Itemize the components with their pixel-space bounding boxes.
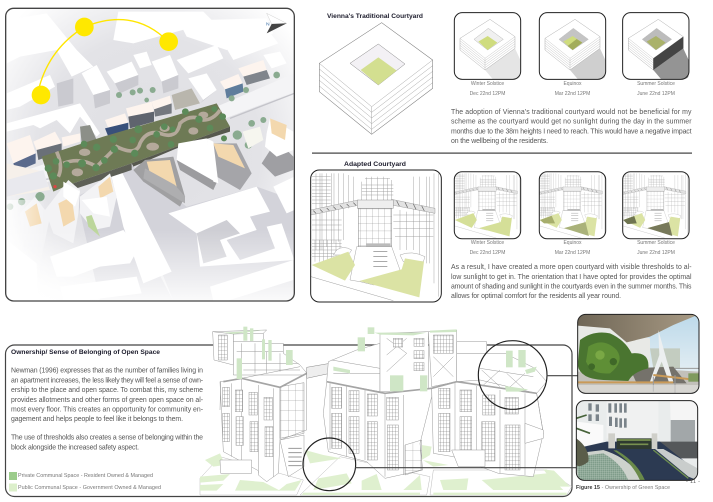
caption: equinox <box>555 81 590 97</box>
icon: sun path <box>32 18 178 104</box>
diagram: building axonometric <box>200 327 572 495</box>
photo: street entrance <box>576 401 698 480</box>
text: adapted courtyard explanation: allows for optimal comfort for the residents all year round. <box>451 293 621 300</box>
text: ownership explanation: gagement and helps people to feel like it belongs to them. <box>11 416 183 423</box>
middle tower <box>323 332 432 478</box>
caption: winter solstice <box>470 81 505 97</box>
caption: adapted winter: Dec 22nd 12PM <box>470 250 505 256</box>
caption: adapted summer: June 22nd 12PM <box>637 250 675 256</box>
caption: equinox: Equinox <box>563 81 582 87</box>
text: ownership explanation: ership to the place and open space. To combat this, my scheme <box>11 387 203 394</box>
text: adapted courtyard explanation: amount of shading and sunlight in the courtyards even in the summer months. This <box>451 284 692 290</box>
caption: adapted summer: Summer Solstice <box>637 240 675 246</box>
green roof planters <box>223 327 537 392</box>
text: adapted courtyard explanation <box>451 264 692 300</box>
diagram: traditional courtyard block <box>319 23 433 134</box>
legend <box>9 472 161 492</box>
caption: adapted equinox: Equinox <box>563 240 582 246</box>
text: adapted courtyard explanation: As a result, I have created a more open courtyard with visible thresholds to al- <box>451 264 692 271</box>
caption: adapted summer <box>637 240 675 256</box>
icon: north compass <box>266 13 287 33</box>
thumbnail: traditional winter solstice <box>454 13 521 79</box>
left tower <box>213 330 308 482</box>
photo: terrace with tree <box>578 314 699 393</box>
text: traditional courtyard explanation <box>451 109 692 145</box>
callout connector lines <box>355 376 578 468</box>
text: traditional courtyard explanation: months due to the 38m heights I need to reach. This would have a negative impact <box>451 128 692 135</box>
text: ownership explanation: provides allotments and other forms of green open space on al- <box>11 397 203 404</box>
caption: adapted winter <box>470 240 505 256</box>
caption: summer solstice: June 22nd 12PM <box>637 91 675 97</box>
thumbnail: adapted winter solstice <box>454 172 521 239</box>
map panel: site axonometric with sun path <box>6 8 294 301</box>
caption: equinox: Mar 22nd 12PM <box>555 91 590 97</box>
caption: winter solstice: Dec 22nd 12PM <box>470 91 505 97</box>
caption: adapted equinox: Mar 22nd 12PM <box>555 250 590 256</box>
text: ownership explanation: most every floor. This creates an opportunity for community en- <box>11 406 203 413</box>
caption: adapted winter: Winter Solstice <box>471 240 504 246</box>
thumbnail: traditional summer solstice <box>623 13 689 79</box>
diagram: adapted courtyard perspective <box>311 170 441 302</box>
heading: ownership: Ownership/ Sense of Belonging of Open Space <box>11 349 160 356</box>
legend: Public Communal Space - Government Owned & Managed <box>18 485 161 491</box>
caption: adapted equinox <box>555 240 590 256</box>
caption: summer solstice: Summer Solstice <box>637 81 675 87</box>
heading: adapted courtyard: Adapted Courtyard <box>344 161 406 168</box>
text: adapted courtyard explanation: low sunlight to get in. The orientation that I have opted for provides the optimal <box>451 274 692 281</box>
heading: Vienna's traditional courtyard: Vienna's Traditional Courtyard <box>327 13 423 20</box>
page number: - 11 - <box>686 479 700 485</box>
caption: summer solstice <box>637 81 675 97</box>
text: traditional courtyard explanation: on the wellbeing of the residents. <box>451 138 548 145</box>
icon: north compass: N <box>266 21 270 27</box>
panel: ownership frame <box>6 345 572 496</box>
text: ownership explanation <box>11 368 203 452</box>
callout circles <box>303 341 547 491</box>
thumbnail: traditional equinox <box>539 13 606 79</box>
legend: Private Communal Space - Resident Owned & Managed <box>18 473 153 479</box>
text: ownership explanation: Newman (1996) expresses that as the number of families living in <box>11 368 203 375</box>
right tower <box>428 330 547 477</box>
thumbnail: adapted equinox <box>539 172 606 239</box>
text: traditional courtyard explanation: scheme as the courtyard would get no sunlight during the day in the summer <box>451 119 692 126</box>
text: ownership explanation: The use of thresholds also creates a sense of belonging within the <box>11 435 203 442</box>
ground lawns <box>200 445 572 495</box>
figure caption: Figure 15 - Ownership of Green Space <box>576 485 670 491</box>
text: ownership explanation: an apartment increases, the less likely they will feel a sense of own- <box>11 377 203 384</box>
thumbnail: adapted summer solstice <box>623 172 689 239</box>
bridge <box>307 363 330 378</box>
text: traditional courtyard explanation: The adoption of Vienna's traditional courtyard would not be beneficial for my <box>451 109 692 116</box>
caption: winter solstice: Winter Solstice <box>471 81 504 87</box>
text: ownership explanation: block alongside the increased safety aspect. <box>11 445 139 452</box>
